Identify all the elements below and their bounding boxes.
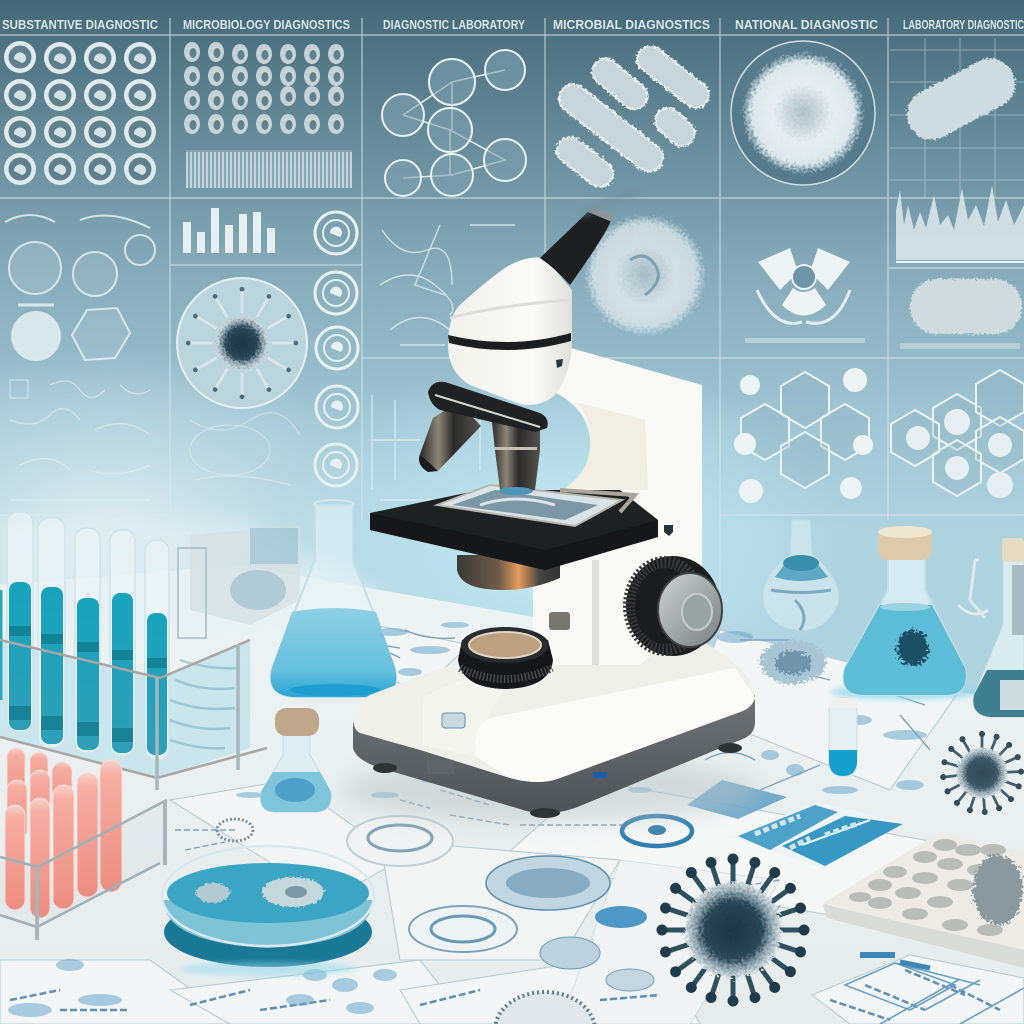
printed culture plates: [347, 816, 654, 1024]
eyepiece tube: [540, 210, 612, 285]
left objective: [420, 402, 481, 471]
head black band: [448, 333, 571, 350]
document marks and blue diagrams: [10, 630, 1000, 1020]
well plate: [823, 832, 1024, 968]
microscope: [340, 190, 760, 824]
panel: left column sketches: [5, 215, 300, 500]
shadow under microscope: [340, 756, 760, 824]
panel: ring icon grid: [4, 41, 156, 185]
panel: radiation emblem: [745, 248, 865, 343]
panel: bar chart: [183, 208, 275, 253]
condenser: [457, 555, 560, 590]
small virus: [940, 731, 1024, 815]
wall background: [0, 0, 1024, 760]
panel: rod bacteria: [552, 41, 714, 192]
paper tables bottom right: [845, 955, 1024, 1024]
ring badge: [622, 816, 692, 846]
panel: graph grid with rod cell: [890, 38, 1024, 198]
panel headings: SUBSTANTIVE DIAGNOSTIC: [2, 17, 159, 32]
central objective: [492, 422, 540, 490]
panel: fuzzy colony: [731, 41, 875, 185]
base front shelf: [475, 668, 755, 782]
panel headings: NATIONAL DIAGNOSTIC: [735, 17, 879, 32]
panel grid lines: [0, 18, 1024, 620]
head: [448, 257, 572, 405]
background equipment behind rack: [178, 525, 300, 638]
partial flask right edge: [973, 538, 1024, 717]
petri dish: [162, 846, 374, 976]
focus knob: [626, 556, 720, 656]
test tube rack with cyan samples: [0, 512, 267, 790]
stage: [370, 490, 658, 570]
panel: spike chart: [896, 185, 1024, 262]
panel headings: MICROBIAL DIAGNOSTICS: [553, 17, 710, 32]
small blue vial: [829, 698, 857, 776]
panel: hexagon cluster centre: [734, 368, 873, 503]
usb port: [593, 772, 607, 778]
base grey band: [353, 695, 755, 813]
erlenmeyer flask centre-left: [271, 500, 396, 697]
panel: virus cell in circle: [177, 278, 307, 408]
lamp ring: [458, 632, 553, 689]
lab bench: [0, 520, 1024, 1024]
dark screw: [664, 525, 673, 536]
arm inner cream face: [565, 402, 648, 490]
blue data cards: [687, 780, 903, 869]
printed documents on bench: [0, 620, 1024, 1024]
pillar mark: [549, 612, 570, 630]
panel: specimen grid and barcode: [184, 42, 352, 188]
panel headings: MICROBIOLOGY DIAGNOSTICS: [183, 17, 350, 32]
base white top: [353, 640, 755, 782]
panel: ring icons column: [315, 212, 358, 486]
small corked flask: [261, 708, 331, 812]
base centre panel: [423, 664, 520, 757]
small blue diagram blobs: [8, 622, 927, 1017]
base feet: [373, 743, 742, 818]
panel: rod cell lower: [900, 279, 1022, 349]
corked flask right: [830, 526, 980, 700]
panel headings: [2, 17, 1024, 32]
panel: hexagon cluster right: [891, 370, 1024, 498]
base label: [442, 713, 465, 728]
base switch: [427, 760, 454, 774]
panel: center sketches: [372, 225, 515, 500]
rack of pink samples: [0, 748, 167, 940]
large virus: [656, 854, 810, 1006]
head screw: [556, 359, 563, 368]
head visor seam: [450, 300, 570, 318]
panel: fuzzy spore: [585, 215, 705, 335]
wall utensil sketch: [958, 560, 988, 618]
faint round flask with culture: [763, 520, 838, 630]
arm and pillar: [533, 345, 702, 665]
pillar strip: [592, 560, 599, 665]
revolving nosepiece: [428, 382, 548, 432]
glass slide: [437, 485, 622, 526]
panel headings: DIAGNOSTIC LABORATORY: [383, 17, 525, 32]
culture cluster on bench: [760, 640, 826, 684]
panel: hexagon cell network: [382, 50, 526, 196]
